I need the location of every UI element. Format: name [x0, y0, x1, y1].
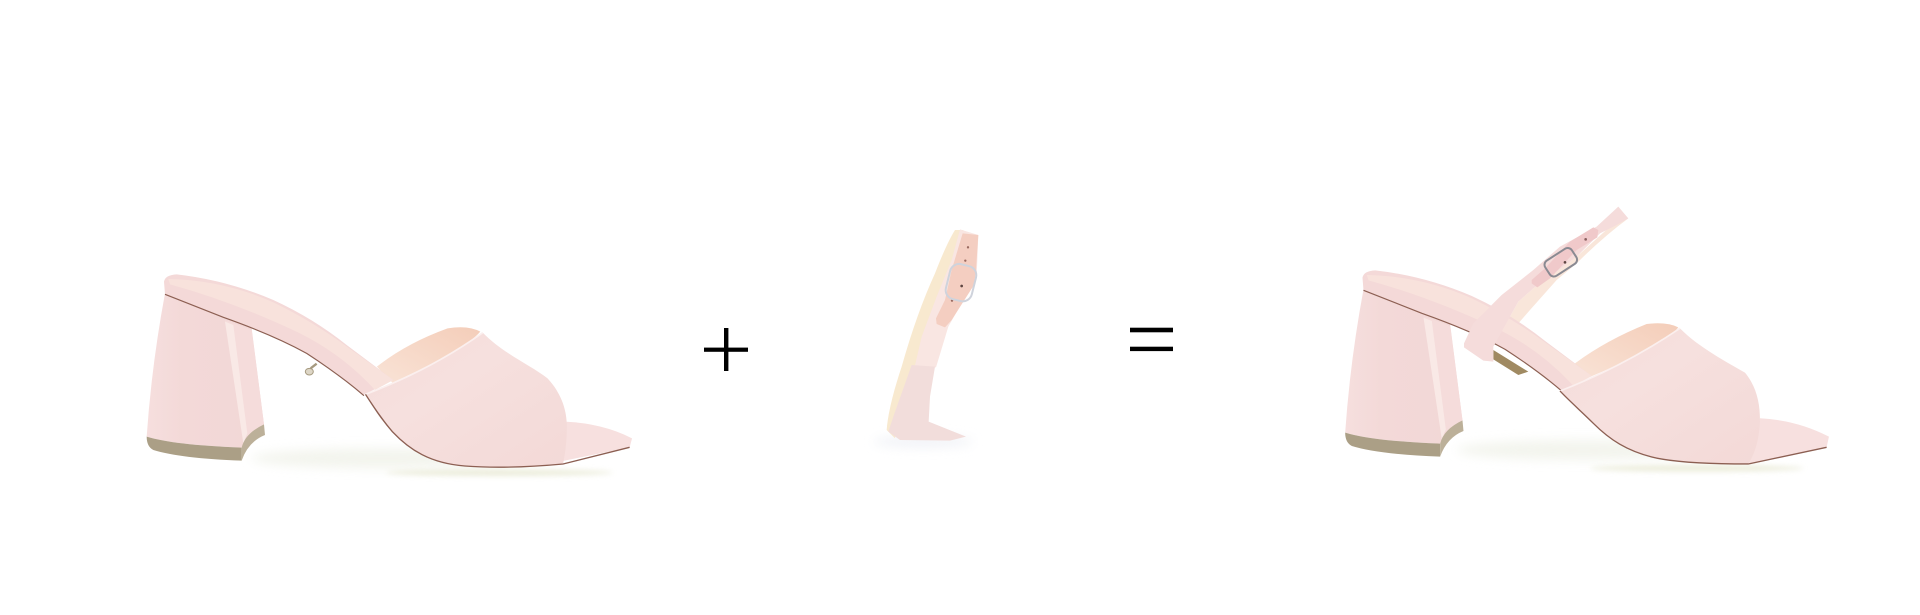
lower strap — [888, 365, 966, 441]
attached ankle strap — [1464, 207, 1628, 375]
vamp top edge highlight — [1560, 328, 1680, 391]
cream side — [887, 230, 963, 438]
equals sign — [1130, 328, 1173, 351]
plus sign — [704, 328, 748, 371]
strap tongue — [1532, 227, 1598, 287]
shoe: backless mule — [147, 274, 632, 476]
ground shadow — [251, 448, 613, 476]
buckle — [944, 262, 978, 303]
toe insole — [1748, 418, 1829, 464]
shoe: mule with strap attached — [1345, 207, 1829, 472]
buckle — [1543, 246, 1579, 278]
lining — [1575, 323, 1678, 378]
metal pin — [305, 364, 317, 375]
vamp top edge highlight — [365, 333, 483, 394]
heel and insole strip — [147, 274, 393, 461]
vamp — [365, 333, 567, 467]
ground shadow — [1457, 440, 1803, 472]
strap inner lining — [1510, 218, 1628, 323]
tongue with holes — [936, 233, 978, 327]
strap band — [1464, 207, 1628, 362]
toe insole — [558, 422, 632, 462]
lining — [377, 327, 480, 383]
heel and insole strip — [1345, 270, 1592, 457]
upper strap — [915, 229, 978, 367]
strap shadow — [873, 436, 973, 448]
sole edge — [1560, 391, 1827, 464]
vamp — [1560, 328, 1760, 464]
accessory: detachable ankle strap — [873, 229, 978, 448]
metal clip — [1493, 350, 1528, 375]
sole edge — [365, 394, 630, 467]
